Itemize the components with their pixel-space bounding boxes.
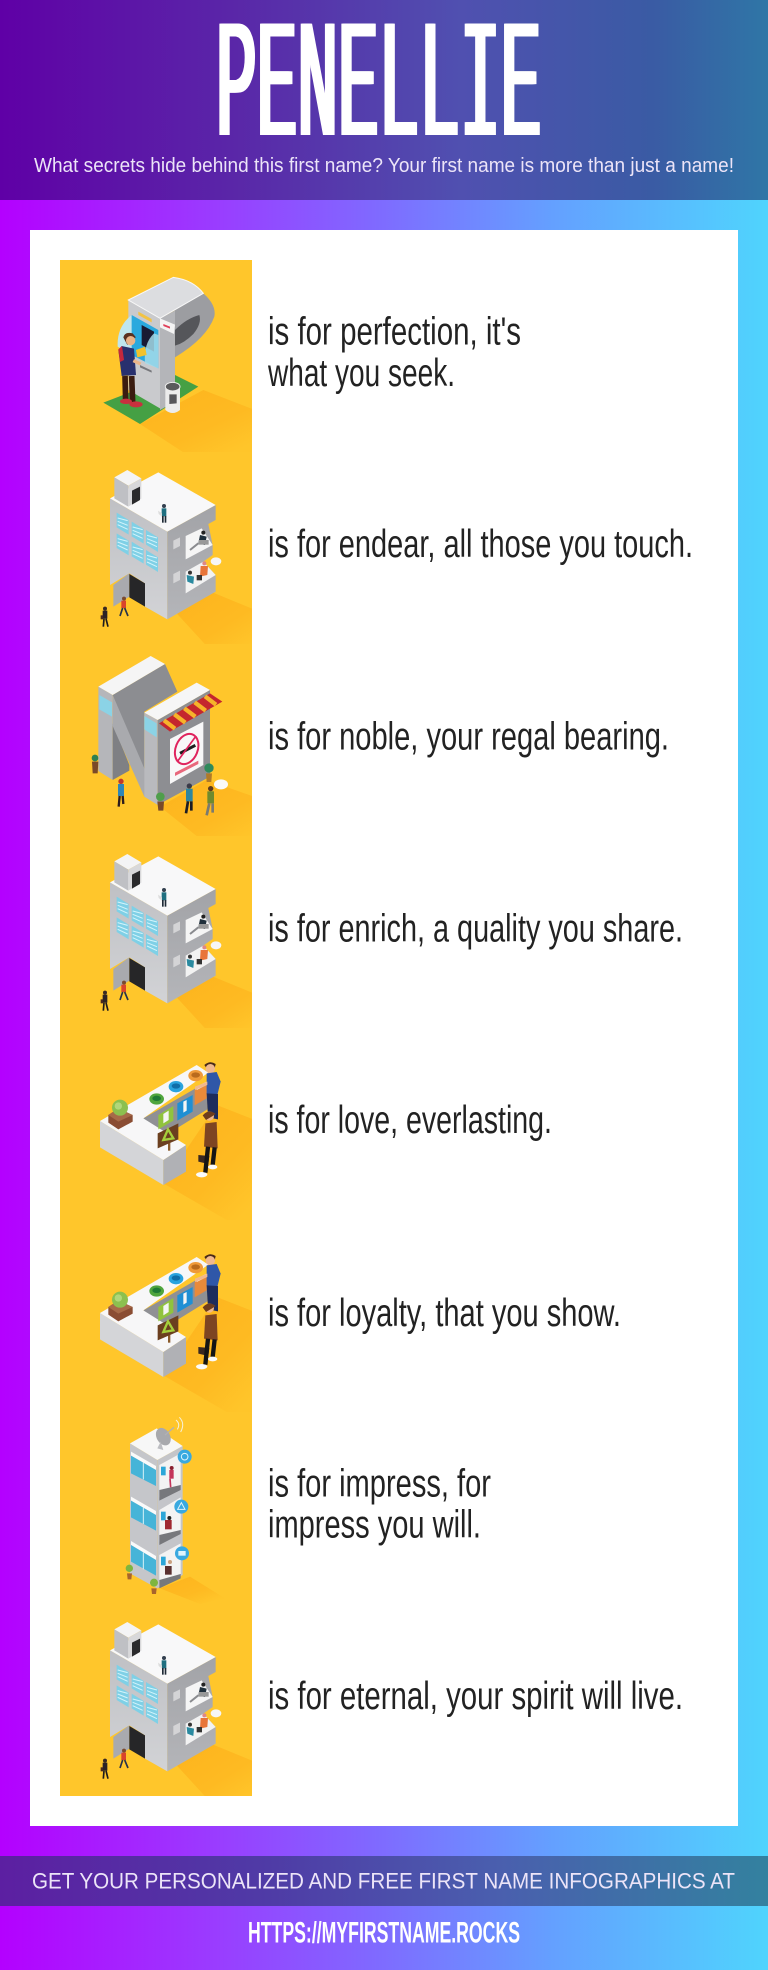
panel: white card: [30, 230, 738, 1826]
text: love: is for love, everlasting.: [268, 1099, 552, 1142]
footer call to action: GET YOUR PERSONALIZED AND FREE FIRST NAME INFOGRAPHICS AT: [32, 1868, 735, 1894]
row 5: letter L: [100, 1062, 550, 1208]
text: perfection: what you seek.: [267, 352, 455, 395]
text: perfection: is for perfection, it's: [268, 310, 521, 354]
row 1: letter P: [103, 277, 521, 457]
row 6: letter L: [100, 1254, 618, 1400]
icon: E shaped building: [100, 1622, 252, 1796]
row 8: letter E: [101, 1622, 683, 1805]
icon: E shaped building: [100, 854, 252, 1028]
subtitle: What secrets hide behind this first name? Your first name is more than just a name!: [34, 155, 734, 177]
row 7: letter I: [126, 1417, 491, 1604]
icon: L shaped recycling stand: [100, 1062, 252, 1208]
row 4: letter E: [101, 854, 683, 1037]
text: impress: impress you will.: [268, 1504, 481, 1547]
icon: I shaped tower: [126, 1417, 212, 1600]
icon: L shaped recycling stand: [100, 1254, 252, 1400]
footer band: [0, 1856, 768, 1906]
footer url: HTTPS://MYFIRSTNAME.ROCKS: [248, 1917, 520, 1950]
text: impress: is for impress, for: [268, 1463, 491, 1506]
icon: P shaped ATM: [103, 277, 263, 457]
icon: N shaped shop: [92, 656, 252, 836]
row 3: letter N: [92, 656, 669, 847]
row 2: letter E: [101, 470, 693, 653]
text: perfection: [267, 310, 521, 395]
text: loyalty: is for loyalty, that you show.: [268, 1292, 621, 1335]
panel: yellow illustration column: [60, 260, 252, 1796]
icon: E shaped building: [100, 470, 252, 644]
header band: [0, 0, 768, 200]
text: impress: [268, 1463, 491, 1547]
